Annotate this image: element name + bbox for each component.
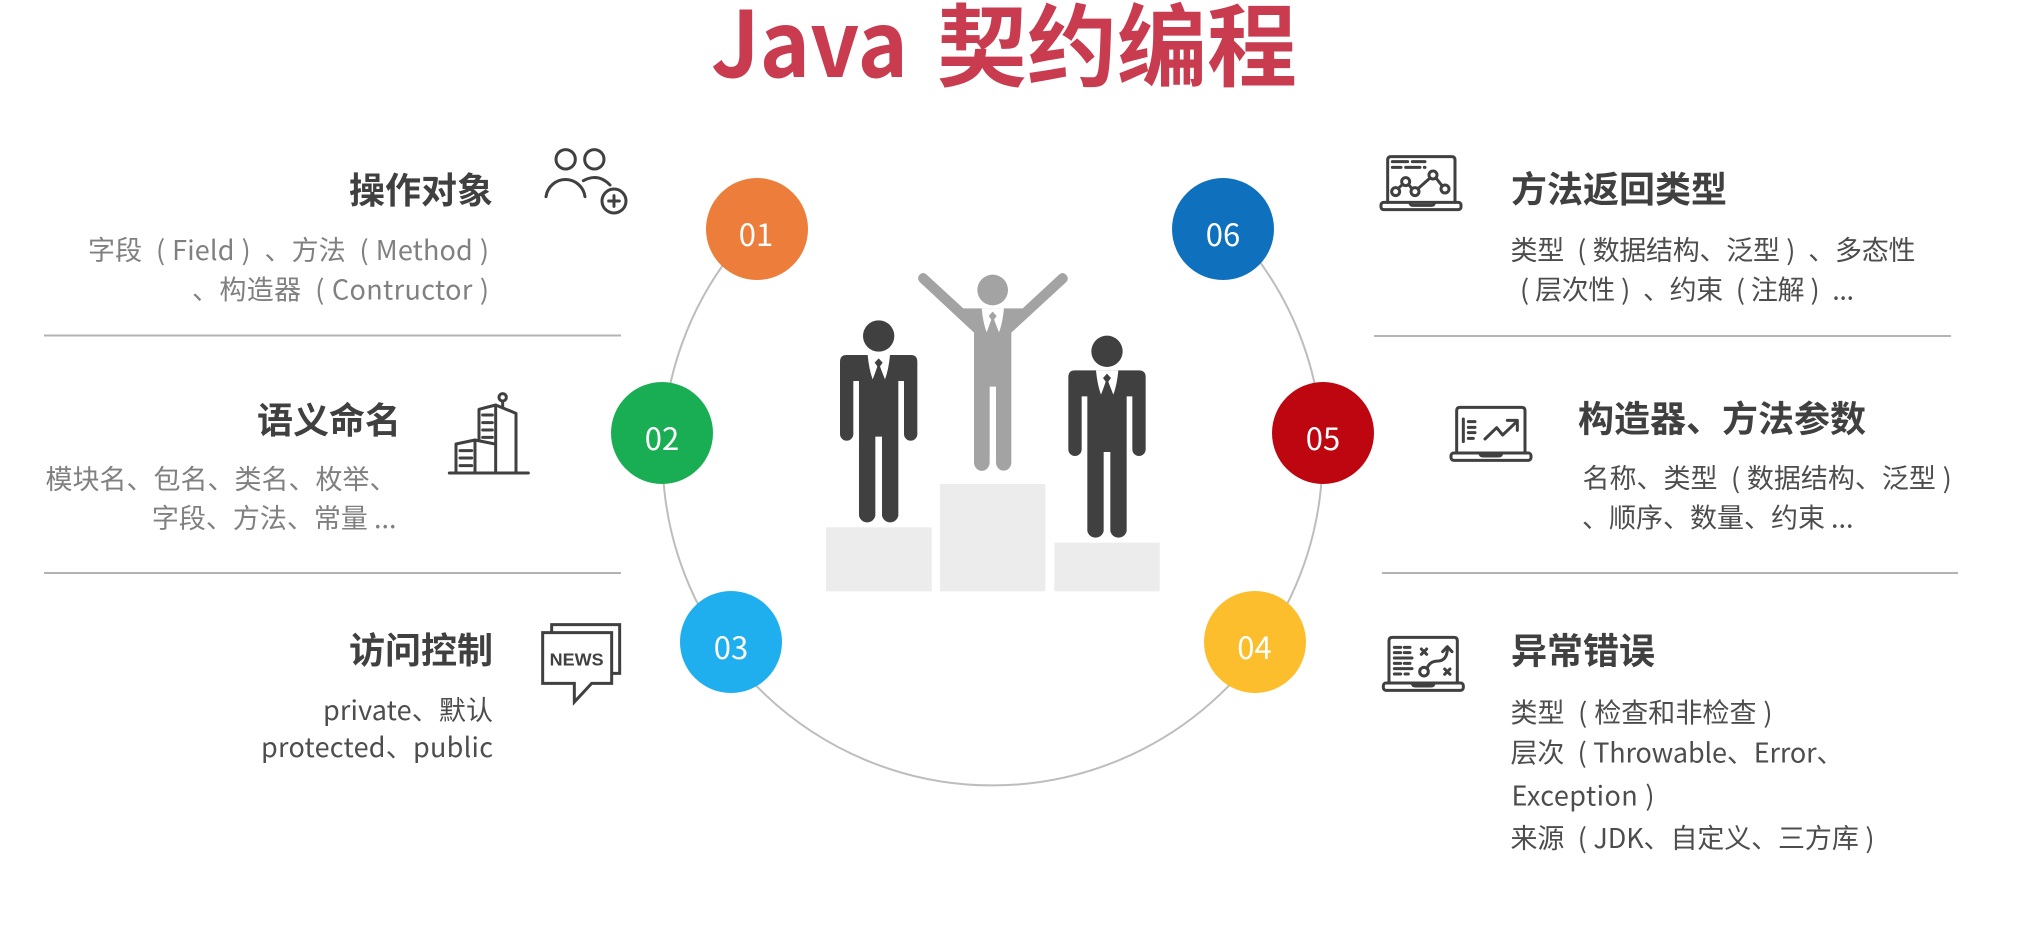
description (1510, 692, 1874, 856)
description: Exception ) (1512, 774, 1654, 814)
description (46, 458, 396, 536)
circle 05 (1272, 382, 1374, 484)
circle 01: 01 (739, 210, 773, 255)
icon: laptop with strategy plan (1383, 637, 1463, 690)
heading: 访问控制 (349, 622, 493, 674)
description: protected、public (261, 726, 493, 765)
circle 06: 06 (1206, 210, 1240, 255)
circle 05: 05 (1306, 414, 1340, 459)
heading: 构造器、方法参数 (1578, 390, 1866, 442)
circle 06 (1172, 178, 1274, 280)
description: 、构造器 ( Contructor ) (192, 268, 489, 308)
heading: 方法返回类型 (1511, 161, 1727, 213)
icon: news speech bubble (543, 625, 620, 702)
description (1582, 457, 1952, 536)
icon: people with plus (546, 150, 626, 213)
circle 03 (680, 591, 782, 693)
panel: 03 访问控制 (261, 622, 620, 765)
circle 04: 04 (1237, 623, 1272, 668)
description (88, 229, 489, 308)
figure: centre with raised arms (918, 273, 1068, 471)
icon: news speech bubble: NEWS (550, 649, 604, 669)
icon: laptop with line chart (1381, 157, 1461, 210)
description: 类型 ( 检查和非检查 ) (1510, 692, 1772, 730)
panel: 04 异常错误 (1383, 622, 1874, 856)
icon: buildings (449, 394, 528, 473)
circle 04 (1204, 591, 1306, 693)
icon: laptop with trend arrow (1451, 407, 1531, 460)
heading: 操作对象 (349, 162, 493, 214)
description: 字段、方法、常量 ... (152, 497, 396, 536)
panel: 06 方法返回类型 (1381, 157, 1916, 308)
description (261, 689, 493, 765)
panel: 02 语义命名 (46, 392, 528, 536)
title (711, 0, 1297, 105)
circle 03: 03 (714, 623, 748, 668)
description: ( 层次性 ) 、约束 ( 注解 ) ... (1520, 268, 1854, 308)
heading: 语义命名 (257, 392, 401, 444)
description: 来源 ( JDK、自定义、三方库 ) (1510, 817, 1874, 856)
panel: 01 操作对象 (88, 150, 626, 308)
figure: left (840, 320, 917, 522)
ring connecting the numbered circles (662, 240, 1322, 785)
podium with three business figures (826, 273, 1160, 591)
circle 02: 02 (645, 414, 679, 459)
circle 01 (706, 178, 808, 280)
description: 层次 ( Throwable、Error、 (1510, 732, 1844, 770)
panel: 05 构造器、方法参数 (1451, 390, 1952, 536)
description: 类型 ( 数据结构、泛型 ) 、多态性 (1510, 229, 1916, 268)
description: 名称、类型 ( 数据结构、泛型 ) (1582, 457, 1952, 496)
description (1510, 229, 1916, 308)
description: 字段 ( Field ) 、方法 ( Method ) (88, 229, 489, 268)
podium blocks (826, 484, 1160, 591)
description: private、默认 (323, 689, 493, 728)
description: 、顺序、数量、约束 ... (1582, 496, 1854, 536)
description: 模块名、包名、类名、枚举、 (46, 458, 396, 497)
figure: right (1068, 336, 1146, 538)
circle 02 (611, 382, 713, 484)
heading: 异常错误 (1511, 622, 1655, 674)
